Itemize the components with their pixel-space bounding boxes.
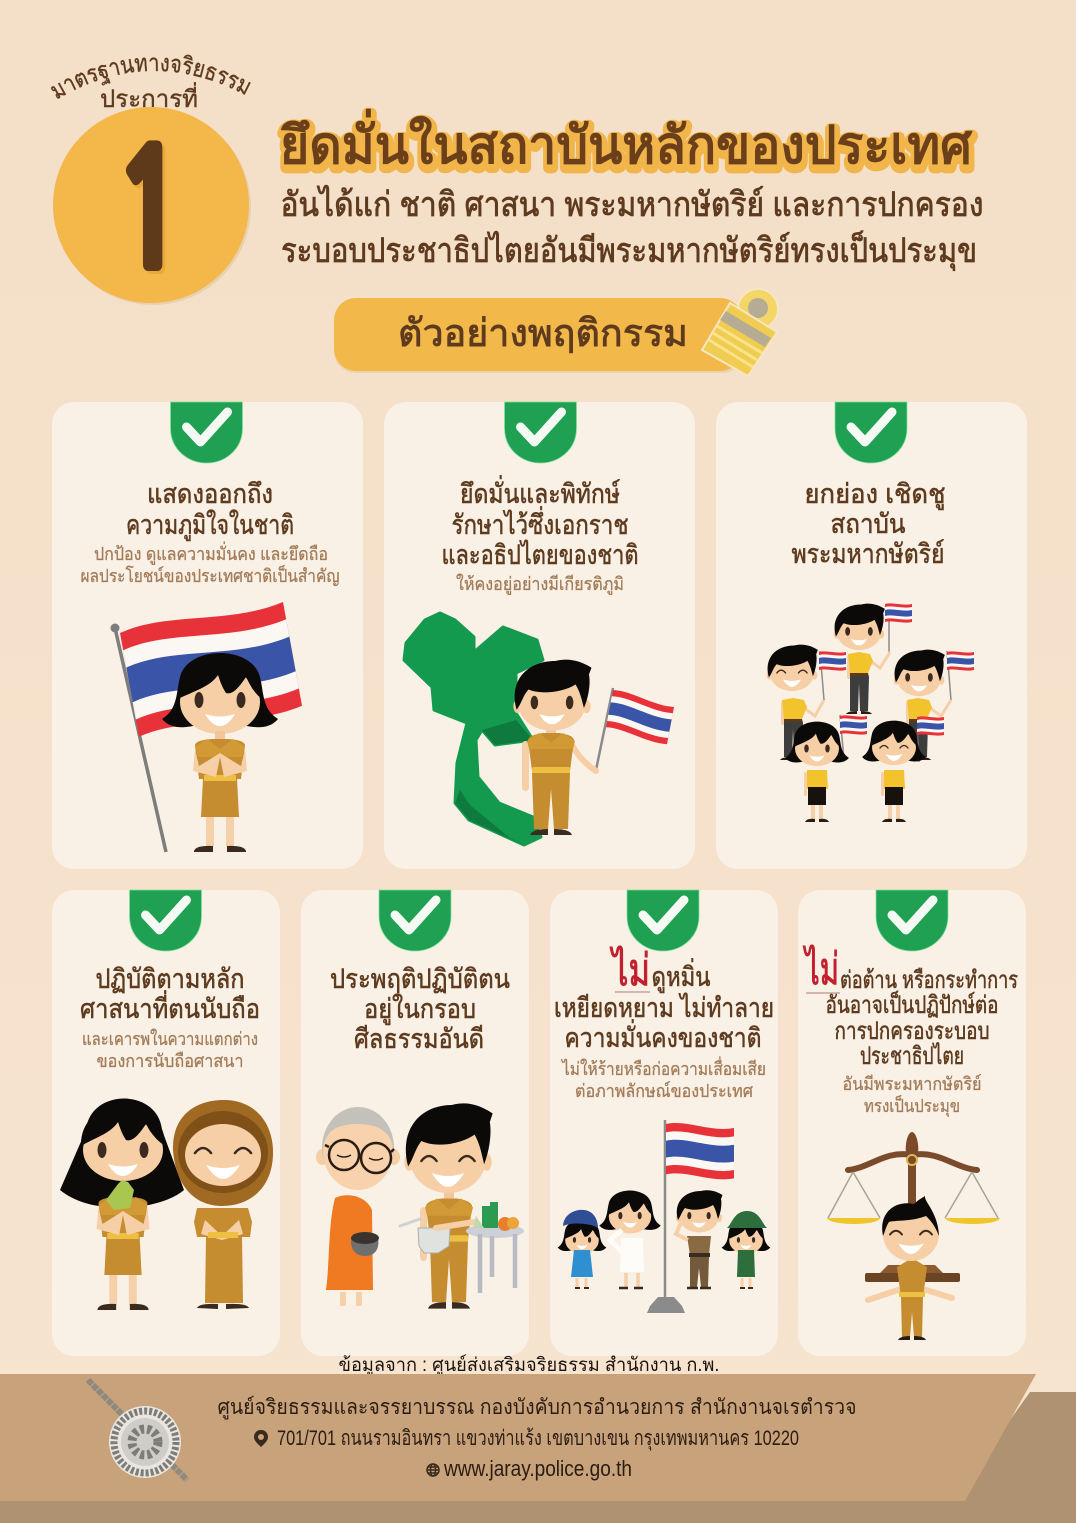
illustration: five people with flags bbox=[767, 603, 974, 822]
illustration: four uniformed youths saluting flag bbox=[558, 1120, 770, 1313]
heading: ประชาธิปไตย bbox=[860, 1042, 964, 1070]
circle with number bbox=[53, 107, 251, 305]
arched caption: มาตรฐานทางจริยธรรม bbox=[51, 54, 251, 99]
heading: ความมั่นคงของชาติ bbox=[564, 1019, 762, 1053]
circle with number: 1 bbox=[114, 131, 186, 290]
heading: ศีลธรรมอันดี bbox=[354, 1024, 484, 1054]
panel: not opposing democracy bbox=[798, 890, 1026, 1356]
footer band bbox=[0, 1374, 1076, 1523]
description: อันมีพระมหากษัตริย์ bbox=[842, 1074, 982, 1094]
icon: check shield bbox=[876, 890, 948, 951]
heading bbox=[330, 964, 510, 1054]
heading bbox=[442, 475, 638, 570]
description: และเคารพในความแตกต่าง bbox=[82, 1028, 258, 1049]
subtitle: ระบอบประชาธิปไตยอันมีพระมหากษัตริย์ทรงเป็นประมุข bbox=[281, 230, 977, 271]
caption: ประการที่: ประการที่ bbox=[100, 82, 198, 113]
illustration: monk and officer giving alms bbox=[316, 1103, 524, 1309]
panel: moral conduct bbox=[301, 890, 529, 1356]
heading: พระมหากษัตริย์ bbox=[792, 538, 944, 569]
description bbox=[842, 1074, 982, 1117]
description: ปกป้อง ดูแลความมั่นคง และยึดถือ bbox=[94, 541, 328, 565]
subtitle bbox=[280, 185, 984, 271]
source credit: ข้อมูลจาก : ศูนย์ส่งเสริมจริยธรรม สำนักงาน ก.พ. bbox=[338, 1354, 720, 1376]
description: ผลประโยชน์ของประเทศชาติเป็นสำคัญ bbox=[80, 564, 340, 586]
icon: check shield bbox=[627, 890, 699, 951]
heading: สถาบัน bbox=[830, 509, 906, 539]
heading: ยกย่อง เชิดชู bbox=[804, 479, 946, 510]
heading: ความภูมิใจในชาติ bbox=[126, 509, 294, 541]
heading bbox=[554, 945, 774, 1053]
heading: รักษาไว้ซึ่งเอกราช bbox=[452, 506, 628, 540]
icon: check shield bbox=[379, 890, 451, 951]
red emphasis word: ไม่ bbox=[610, 945, 650, 995]
behaviour examples label bbox=[334, 289, 778, 376]
icon: globe bbox=[427, 1464, 439, 1476]
website: www.jaray.police.go.th bbox=[443, 1456, 632, 1481]
number badge with arched caption bbox=[51, 54, 251, 305]
heading bbox=[792, 479, 946, 569]
heading: ศาสนาที่ตนนับถือ bbox=[80, 990, 260, 1024]
description: ไม่ให้ร้ายหรือก่อความเสื่อมเสีย bbox=[560, 1056, 766, 1079]
description: ทรงเป็นประมุข bbox=[864, 1094, 960, 1117]
heading: อันอาจเป็นปฏิปักษ์ต่อ bbox=[826, 990, 998, 1019]
heading: ยึดมั่นและพิทักษ์ bbox=[460, 475, 621, 509]
icon: epaulette bbox=[702, 289, 778, 376]
heading: ประพฤติปฏิบัติตน bbox=[330, 964, 510, 994]
heading bbox=[126, 479, 294, 541]
title: ยึดมั่นในสถาบันหลักของประเทศ bbox=[281, 113, 974, 179]
red emphasis word: ไม่ bbox=[803, 944, 839, 994]
circle with number: 1 bbox=[117, 134, 189, 293]
heading: ต่อต้าน หรือกระทำการ bbox=[840, 967, 1018, 994]
heading: แสดงออกถึง bbox=[147, 479, 273, 509]
heading bbox=[80, 964, 260, 1024]
description: ต่อภาพลักษณ์ของประเทศ bbox=[575, 1081, 754, 1101]
heading: ปฏิบัติตามหลัก bbox=[96, 964, 244, 994]
heading: อยู่ในกรอบ bbox=[364, 993, 476, 1025]
icon: location pin bbox=[254, 1430, 268, 1447]
illustration: officer with scales of justice bbox=[827, 1132, 1000, 1340]
illustration: map of Thailand and boy with flag bbox=[404, 613, 674, 845]
heading bbox=[803, 944, 1018, 1070]
organisation name: ศูนย์จริยธรรมและจรรยาบรรณ กองบังคับการอำนวยการ สำนักงานจเรตำรวจ bbox=[218, 1395, 856, 1420]
address: 701/701 ถนนรามอินทรา แขวงท่าแร้ง เขตบางเขน กรุงเทพมหานคร 10220 bbox=[277, 1427, 799, 1451]
illustration: girl with Thai flag bbox=[110, 599, 303, 852]
heading: ดูหมิ่น bbox=[652, 958, 710, 993]
subtitle: อันได้แก่ ชาติ ศาสนา พระมหากษัตริย์ และการปกครอง bbox=[280, 185, 984, 224]
description: ให้คงอยู่อย่างมีเกียรติภูมิ bbox=[456, 573, 624, 595]
icon: check shield bbox=[504, 402, 576, 463]
heading: และอธิปไตยของชาติ bbox=[442, 540, 638, 570]
police seal bbox=[88, 1380, 187, 1480]
panel: honouring the monarchy bbox=[716, 402, 1027, 869]
panel: not insulting the nation bbox=[550, 890, 778, 1356]
description bbox=[560, 1056, 766, 1101]
panel: upholding sovereignty bbox=[384, 402, 695, 869]
description: ของการนับถือศาสนา bbox=[96, 1051, 244, 1071]
illustration: two women in uniform bbox=[60, 1098, 273, 1310]
description bbox=[82, 1028, 258, 1071]
heading: การปกครองระบอบ bbox=[834, 1018, 990, 1045]
heading: เหยียดหยาม ไม่ทำลาย bbox=[554, 993, 774, 1023]
panel: practising religion bbox=[52, 890, 280, 1356]
title: ยึดมั่นในสถาบันหลักของประเทศ bbox=[280, 109, 973, 175]
panel: national pride bbox=[52, 402, 363, 869]
description bbox=[80, 541, 340, 586]
icon: check shield bbox=[130, 890, 202, 951]
icon: check shield bbox=[170, 402, 242, 463]
icon: check shield bbox=[835, 402, 907, 463]
label text: ตัวอย่างพฤติกรรม bbox=[398, 313, 688, 355]
